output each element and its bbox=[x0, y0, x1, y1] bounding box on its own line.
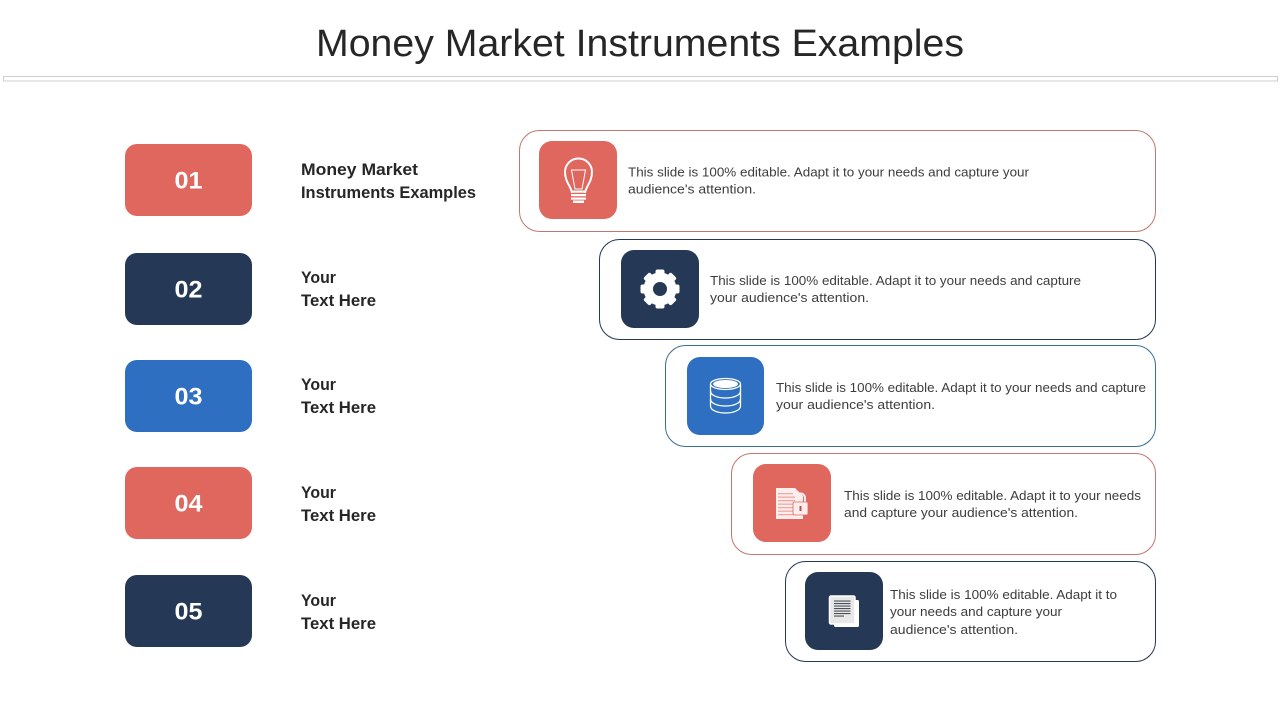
icon: locked document bbox=[753, 464, 831, 542]
description 03 bbox=[776, 381, 1146, 412]
card 03 outline bbox=[666, 346, 1156, 446]
description 03: your audience's attention. bbox=[776, 398, 935, 412]
icon: light bulb bbox=[539, 141, 617, 219]
description 01 bbox=[628, 166, 1029, 196]
description 05: audience's attention. bbox=[890, 623, 1018, 637]
label 01: Instruments Examples bbox=[301, 184, 476, 202]
description 04: This slide is 100% editable. Adapt it to your needs bbox=[844, 489, 1141, 503]
row 05 bbox=[125, 562, 1156, 662]
label 04: Text Here bbox=[301, 507, 376, 525]
description 01: audience's attention. bbox=[628, 182, 756, 196]
row 03 bbox=[125, 346, 1156, 446]
label 05: Your bbox=[301, 592, 337, 610]
number badge 05 bbox=[125, 575, 252, 647]
description 05 bbox=[890, 588, 1117, 637]
number badge 02 bbox=[125, 253, 252, 325]
number badge 04 bbox=[125, 467, 252, 539]
row 04 bbox=[125, 454, 1156, 554]
number badge 01 bbox=[125, 144, 252, 216]
number badge 05: 05 bbox=[174, 598, 202, 626]
number badge 02: 02 bbox=[174, 276, 202, 304]
label 03: Your bbox=[301, 376, 337, 394]
label 04 bbox=[301, 484, 376, 525]
description 03: This slide is 100% editable. Adapt it to your needs and capture bbox=[776, 381, 1146, 395]
icon: gear bbox=[621, 250, 699, 328]
label 04: Your bbox=[301, 484, 337, 502]
label 05 bbox=[301, 592, 376, 633]
number badge 03: 03 bbox=[174, 384, 202, 410]
label 02 bbox=[301, 269, 376, 310]
label 01 bbox=[301, 161, 476, 202]
icon: documents bbox=[805, 572, 883, 650]
number badge 01: 01 bbox=[174, 168, 202, 194]
description 05: This slide is 100% editable. Adapt it to bbox=[890, 588, 1117, 602]
description 02: This slide is 100% editable. Adapt it to your needs and capture bbox=[710, 274, 1081, 288]
card 01 outline bbox=[520, 130, 1156, 232]
description 01: This slide is 100% editable. Adapt it to your needs and capture your bbox=[628, 166, 1029, 180]
label 02: Text Here bbox=[301, 292, 376, 310]
description 02 bbox=[710, 274, 1081, 305]
title underline bar bbox=[4, 76, 1278, 81]
label 03: Text Here bbox=[301, 399, 376, 417]
label 03 bbox=[301, 376, 376, 417]
description 05: your needs and capture your bbox=[890, 605, 1062, 619]
label 01: Money Market bbox=[301, 161, 419, 179]
number badge 04: 04 bbox=[174, 490, 203, 518]
row 01 bbox=[125, 130, 1156, 232]
icon: database bbox=[687, 357, 764, 435]
card 04 outline bbox=[732, 454, 1156, 554]
number badge 03 bbox=[125, 360, 252, 432]
title: Money Market Instruments Examples bbox=[316, 23, 964, 65]
description 02: your audience's attention. bbox=[710, 291, 869, 305]
label 02: Your bbox=[301, 269, 337, 287]
description 04: and capture your audience's attention. bbox=[844, 506, 1078, 520]
description 04 bbox=[844, 489, 1141, 520]
card 02 outline bbox=[600, 240, 1156, 340]
row 02 bbox=[125, 240, 1156, 340]
label 05: Text Here bbox=[301, 615, 376, 633]
card 05 outline bbox=[786, 562, 1156, 662]
